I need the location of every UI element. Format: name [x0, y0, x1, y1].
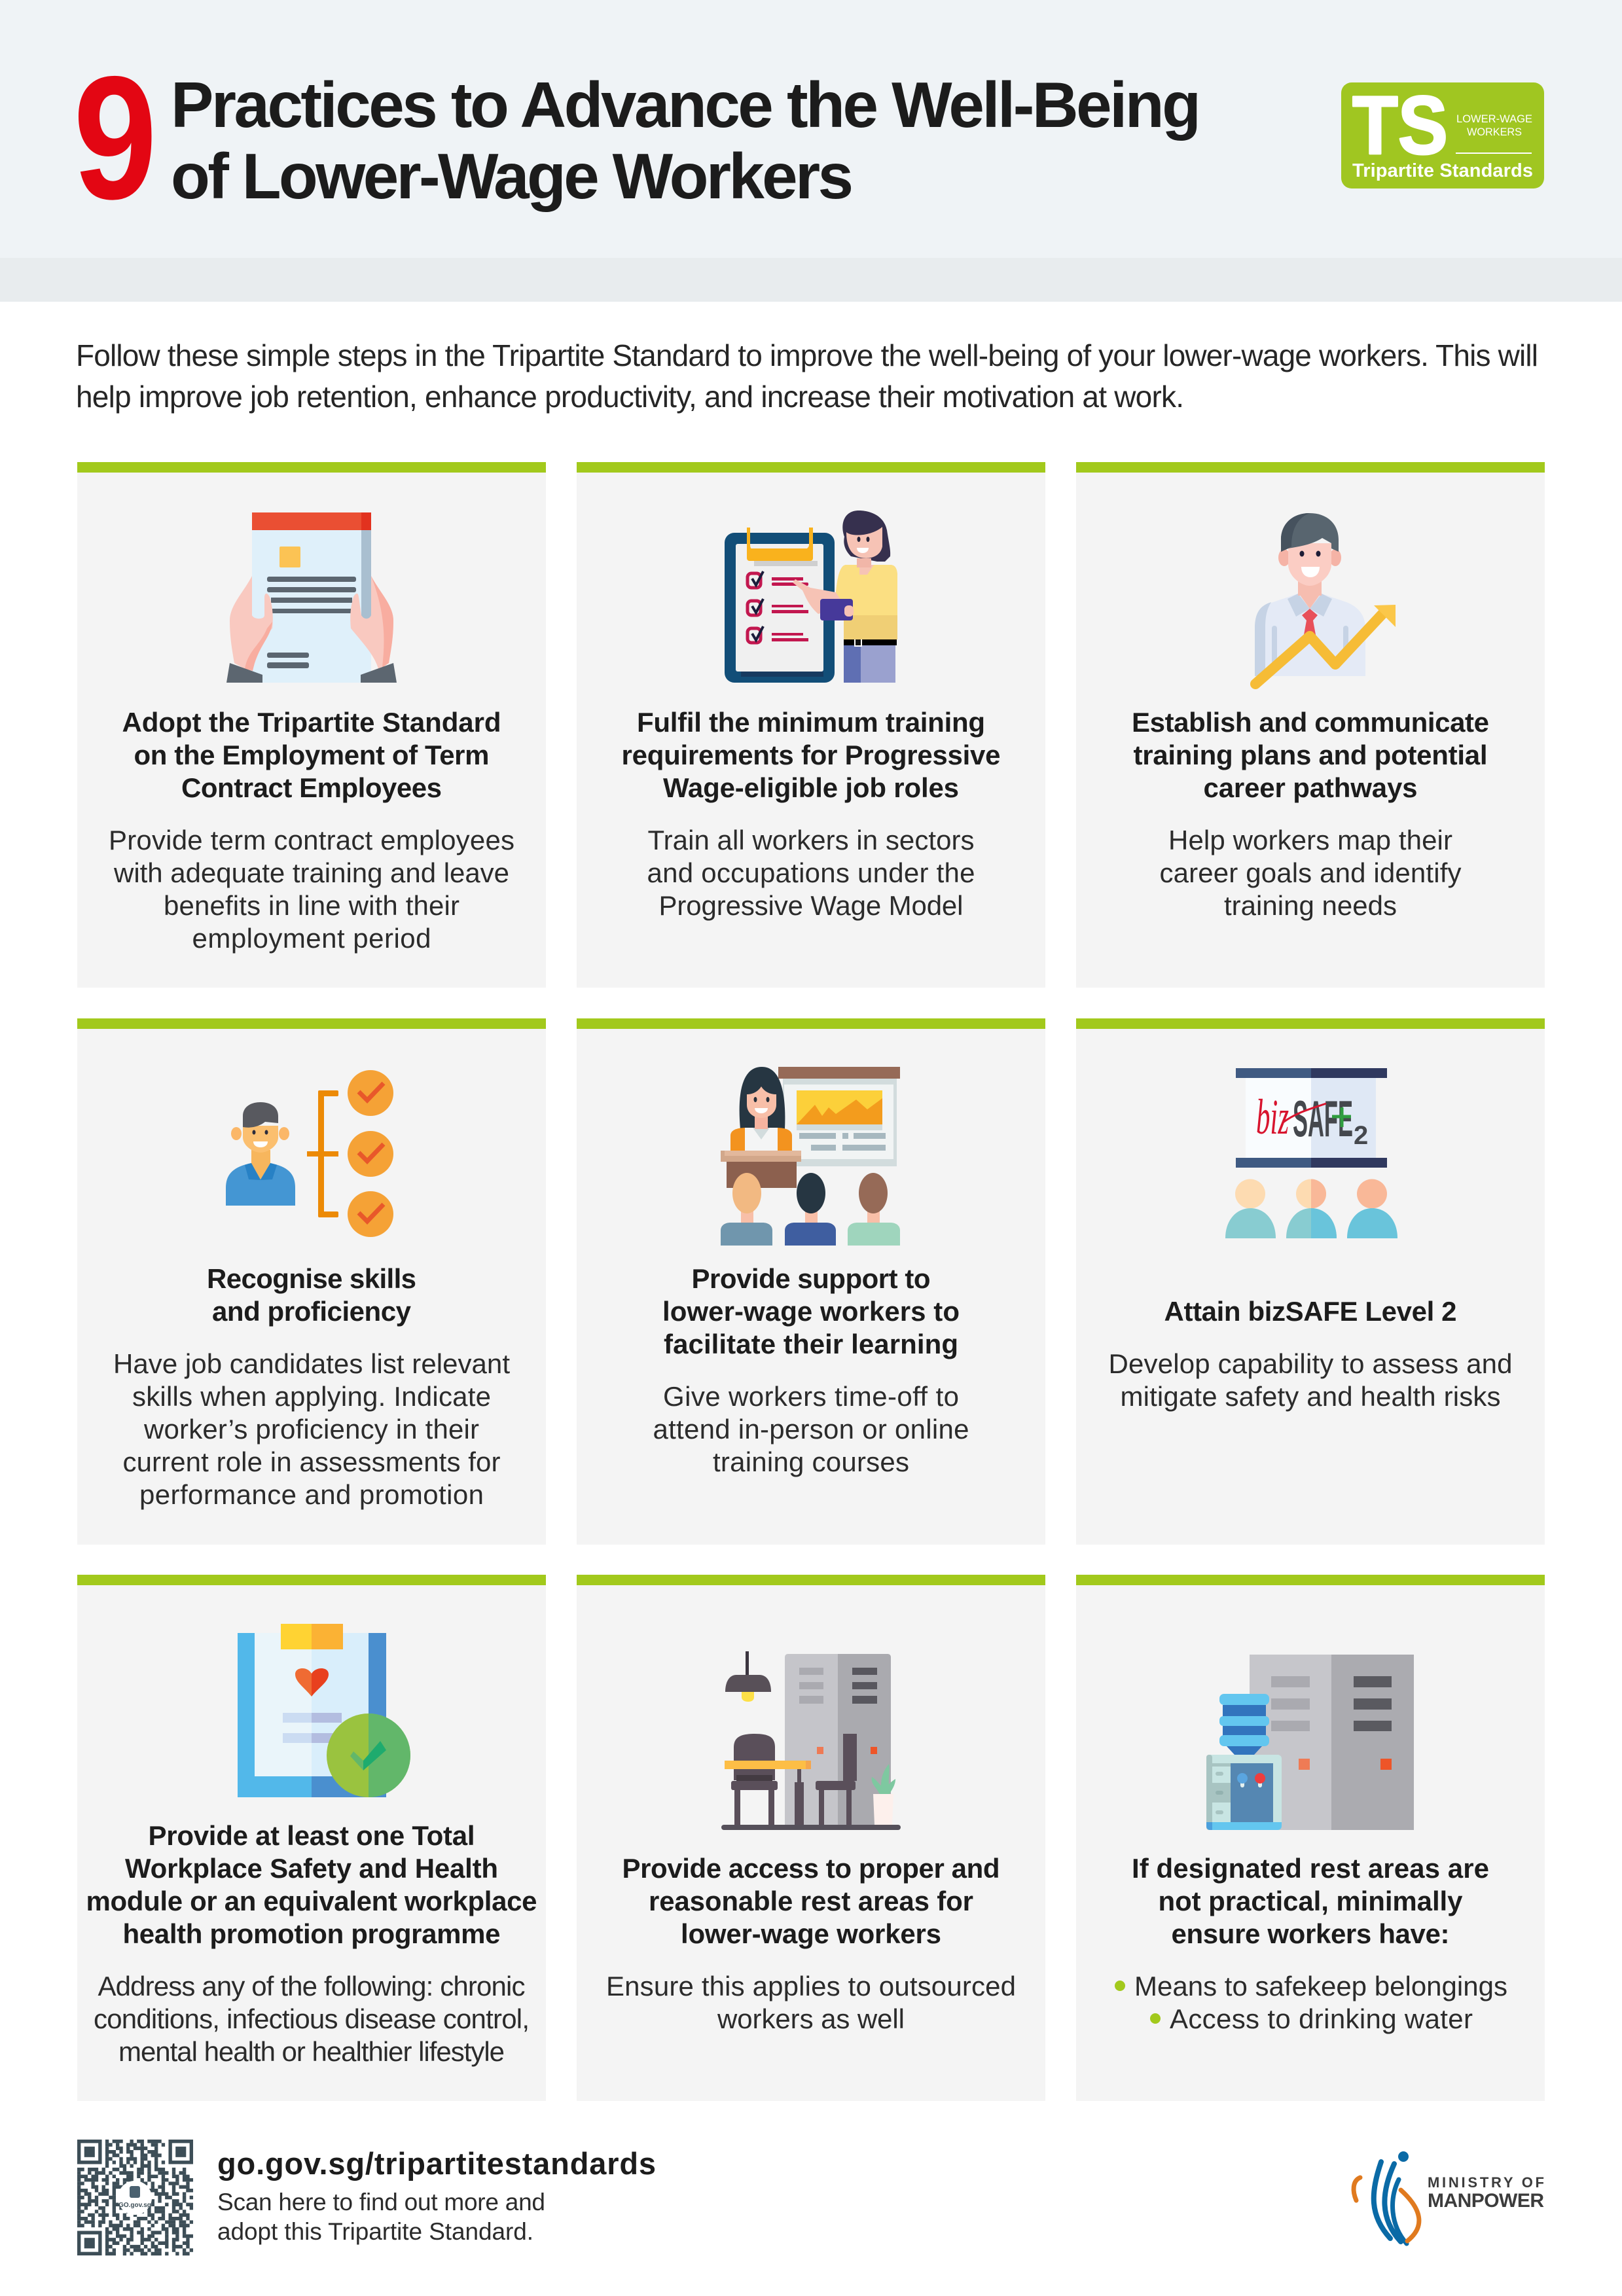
bullet list: Access to drinking water	[1170, 2003, 1473, 2034]
heading: Attain bizSAFE Level 2	[1164, 1296, 1457, 1327]
heading: ensure workers have:	[1172, 1918, 1449, 1949]
heading: module or an equivalent workplace	[86, 1886, 537, 1916]
panel: minimum training	[577, 462, 1045, 988]
panel: minimal alternatives	[1076, 1575, 1545, 2101]
icon: rest area with lockers, table, chairs and lamp	[721, 1651, 901, 1830]
icon: lockers and water dispenser	[1206, 1655, 1414, 1830]
heading: and proficiency	[212, 1296, 412, 1327]
description: current role in assessments for	[123, 1446, 500, 1477]
description	[1160, 825, 1461, 921]
heading: facilitate their learning	[664, 1329, 958, 1359]
description	[1109, 1348, 1512, 1412]
description	[653, 1381, 969, 1477]
heading: Contract Employees	[181, 772, 442, 803]
heading	[622, 1853, 1000, 1949]
panel: recognise skills	[77, 1018, 546, 1545]
intro text: help improve job retention, enhance productivity, and increase their motivation at work.	[76, 380, 1184, 414]
description: worker’s proficiency in their	[143, 1414, 479, 1444]
heading	[86, 1820, 537, 1949]
heading: Recognise skills	[207, 1263, 416, 1294]
description: career goals and identify	[1160, 857, 1461, 888]
heading: If designated rest areas are	[1132, 1853, 1489, 1884]
heading: health promotion programme	[123, 1918, 500, 1949]
heading: lower-wage workers to	[662, 1296, 960, 1327]
heading: career pathways	[1203, 772, 1418, 803]
description: Give workers time-off to	[663, 1381, 959, 1412]
description	[606, 1971, 1016, 2034]
icon: health clipboard with check badge	[238, 1624, 410, 1797]
icon: bizSAFE board and audience: 2	[1354, 1121, 1368, 1150]
icon: bizSAFE board and audience: SAFE	[1293, 1090, 1353, 1147]
panel: total workplace safety and health	[77, 1575, 546, 2101]
description: skills when applying. Indicate	[132, 1381, 491, 1412]
heading	[207, 1263, 416, 1327]
heading	[122, 707, 501, 803]
bullet list: Means to safekeep belongings	[1134, 1971, 1507, 2001]
footer URL and call to action	[217, 2146, 656, 2245]
icon: bizSAFE board and audience: biz	[1256, 1090, 1289, 1145]
description: Provide term contract employees	[109, 825, 514, 855]
description: employment period	[192, 923, 431, 954]
heading: Workplace Safety and Health	[125, 1853, 498, 1884]
logo: Tripartite Standards lower-wage workers	[1341, 79, 1544, 188]
logo: Tripartite Standards lower-wage workers: LOWER-WAGE	[1456, 113, 1532, 125]
description: workers as well	[717, 2003, 905, 2034]
logo: Ministry of Manpower	[1354, 2151, 1544, 2244]
logo: Tripartite Standards lower-wage workers: Tripartite Standards	[1352, 160, 1533, 181]
description: Address any of the following: chronic	[98, 1971, 525, 2001]
panel: adopt the tripartite standard	[77, 462, 546, 988]
heading: Provide at least one Total	[148, 1820, 475, 1851]
footer URL and call to action: go.gov.sg/tripartitestandards	[217, 2146, 656, 2181]
QR code: GO.gov.sg	[118, 2202, 151, 2209]
description: Train all workers in sectors	[648, 825, 974, 855]
title: of Lower-Wage Workers	[171, 140, 854, 212]
icon: worker with skill checklist	[226, 1070, 393, 1237]
description: training courses	[713, 1446, 909, 1477]
icon: document held in hands	[226, 512, 397, 683]
heading: Provide support to	[691, 1263, 931, 1294]
heading: Provide access to proper and	[622, 1853, 1000, 1884]
logo: Tripartite Standards lower-wage workers: TS	[1352, 79, 1448, 171]
description: Have job candidates list relevant	[113, 1348, 510, 1379]
description: conditions, infectious disease control,	[94, 2003, 530, 2034]
description	[109, 825, 514, 954]
QR code	[77, 2140, 193, 2255]
icon: man with rising arrow	[1255, 513, 1396, 684]
heading: Establish and communicate	[1132, 707, 1489, 738]
footer URL and call to action: Scan here to find out more and	[217, 2189, 545, 2215]
intro text	[76, 338, 1538, 414]
description: Ensure this applies to outsourced	[606, 1971, 1016, 2001]
description: performance and promotion	[139, 1479, 484, 1510]
title: Practices to Advance the Well-Being	[171, 69, 1201, 141]
icon: presenter with audience	[721, 1067, 900, 1246]
description: mitigate safety and health risks	[1121, 1381, 1500, 1412]
header band	[0, 0, 1622, 302]
description: mental health or healthier lifestyle	[118, 2036, 505, 2067]
heading: Wage-eligible job roles	[663, 772, 959, 803]
heading: training plans and potential	[1134, 740, 1487, 770]
description: Help workers map their	[1168, 825, 1452, 855]
panel: support learning	[577, 1018, 1045, 1545]
logo: Ministry of Manpower: MANPOWER	[1428, 2190, 1544, 2212]
description: Progressive Wage Model	[658, 890, 964, 921]
number 9: 9	[73, 39, 157, 236]
panel: training plans and career pathways	[1076, 462, 1545, 988]
heading: Fulfil the minimum training	[637, 707, 985, 738]
heading	[1132, 707, 1489, 803]
description: benefits in line with their	[164, 890, 460, 921]
heading	[662, 1263, 960, 1359]
description: with adequate training and leave	[113, 857, 509, 888]
heading: not practical, minimally	[1159, 1886, 1463, 1916]
logo: Tripartite Standards lower-wage workers: WORKERS	[1467, 126, 1522, 138]
icon: clipboard checklist and woman	[725, 511, 897, 683]
panel: bizSAFE level 2	[1076, 1018, 1545, 1545]
heading: requirements for Progressive	[622, 740, 1000, 770]
description: training needs	[1224, 890, 1397, 921]
logo: Ministry of Manpower: MINISTRY OF	[1428, 2174, 1544, 2191]
panel: rest areas	[577, 1575, 1045, 2101]
description: and occupations under the	[647, 857, 975, 888]
description	[647, 825, 975, 921]
heading: reasonable rest areas for	[649, 1886, 973, 1916]
heading: Adopt the Tripartite Standard	[122, 707, 501, 738]
description	[113, 1348, 510, 1510]
icon: bizSAFE board and audience	[1225, 1068, 1397, 1238]
heading	[622, 707, 1000, 803]
description	[94, 1971, 530, 2067]
title	[171, 69, 1201, 212]
description: attend in-person or online	[653, 1414, 969, 1444]
footer URL and call to action: adopt this Tripartite Standard.	[217, 2218, 533, 2245]
heading: lower-wage workers	[681, 1918, 941, 1949]
intro text: Follow these simple steps in the Tripartite Standard to improve the well-being of your lower-wage workers. This will	[76, 338, 1538, 372]
heading: on the Employment of Term	[134, 740, 490, 770]
description: Develop capability to assess and	[1109, 1348, 1512, 1379]
bullet list	[1115, 1971, 1507, 2034]
heading	[1132, 1853, 1489, 1949]
